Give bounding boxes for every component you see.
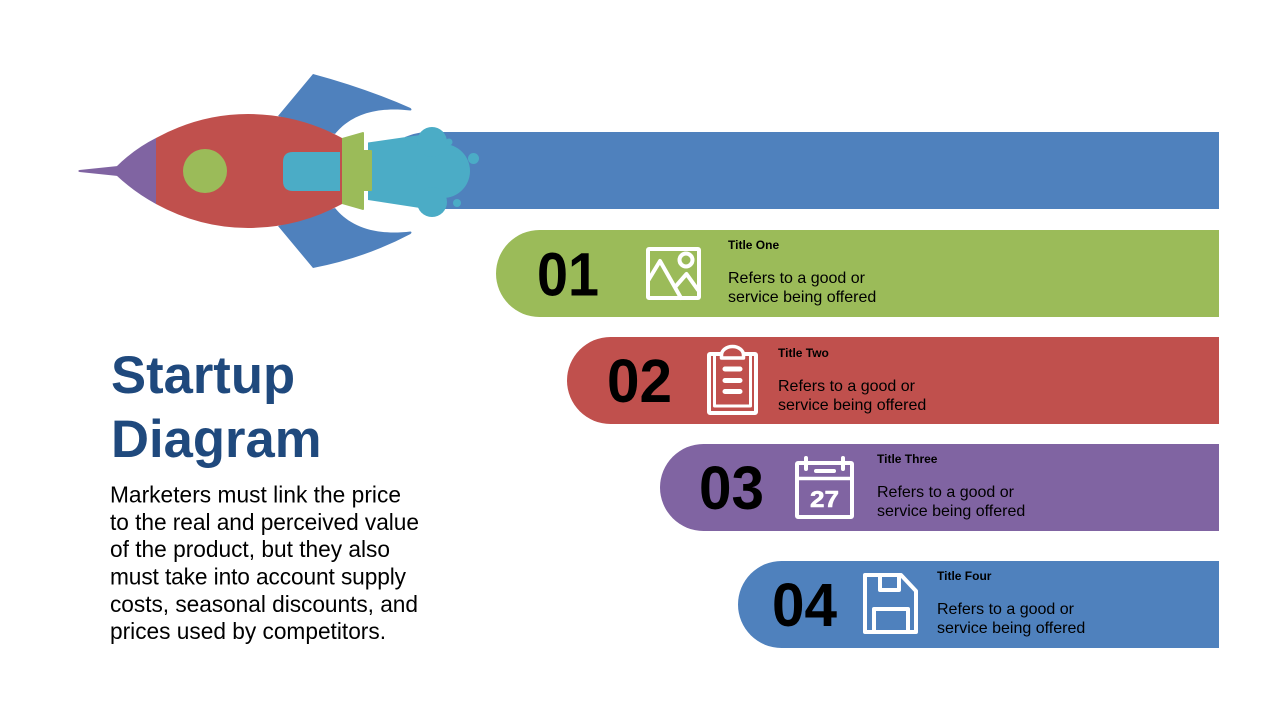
number 04: 04 xyxy=(772,571,837,639)
heading: Startup Diagram xyxy=(111,346,321,469)
description text: costs, seasonal discounts, and xyxy=(110,591,418,617)
text two xyxy=(778,378,926,414)
panel: step 03 xyxy=(660,444,1219,531)
text one: service being offered xyxy=(728,289,876,306)
rocket exhaust flame xyxy=(368,127,479,217)
rocket body xyxy=(156,114,342,228)
title four: Title Four xyxy=(937,569,992,583)
rocket nose xyxy=(116,138,156,204)
text four: Refers to a good or xyxy=(937,601,1075,618)
icon: calendar xyxy=(797,458,852,517)
rocket bottom fin xyxy=(278,208,412,268)
rocket top fin xyxy=(278,74,412,134)
rocket hatch xyxy=(283,152,340,191)
title three: Title Three xyxy=(877,452,938,466)
title one: Title One xyxy=(728,238,779,252)
panel: step 01 xyxy=(496,230,1219,317)
description text xyxy=(110,482,419,644)
rocket nozzle xyxy=(342,132,372,210)
number 02: 02 xyxy=(607,347,672,415)
rocket window xyxy=(183,149,227,193)
heading: Startup Diagram: Diagram xyxy=(111,410,321,469)
icon: image xyxy=(648,249,699,298)
top banner bar xyxy=(405,132,1219,209)
title two: Title Two xyxy=(778,346,829,360)
text four: service being offered xyxy=(937,620,1085,637)
heading: Startup Diagram: Startup xyxy=(111,346,295,405)
text four xyxy=(937,601,1085,637)
icon: clipboard xyxy=(709,346,756,413)
description text: must take into account supply xyxy=(110,564,407,590)
calendar date: 27 xyxy=(810,486,839,512)
rocket needle xyxy=(78,166,118,176)
panel: step 02 xyxy=(567,337,1219,424)
description text: Marketers must link the price xyxy=(110,482,401,508)
panel: step 04 xyxy=(738,561,1219,648)
text three xyxy=(877,484,1025,520)
text two: service being offered xyxy=(778,397,926,414)
text one xyxy=(728,270,876,306)
text three: Refers to a good or xyxy=(877,484,1015,501)
number 03: 03 xyxy=(699,454,764,522)
text one: Refers to a good or xyxy=(728,270,866,287)
description text: of the product, but they also xyxy=(110,536,390,562)
text three: service being offered xyxy=(877,503,1025,520)
icon: floppy disk xyxy=(865,575,916,632)
icon: rocket xyxy=(78,74,479,268)
description text: to the real and perceived value xyxy=(110,509,419,535)
description text: prices used by competitors. xyxy=(110,618,386,644)
number 01: 01 xyxy=(537,240,599,308)
text two: Refers to a good or xyxy=(778,378,916,395)
